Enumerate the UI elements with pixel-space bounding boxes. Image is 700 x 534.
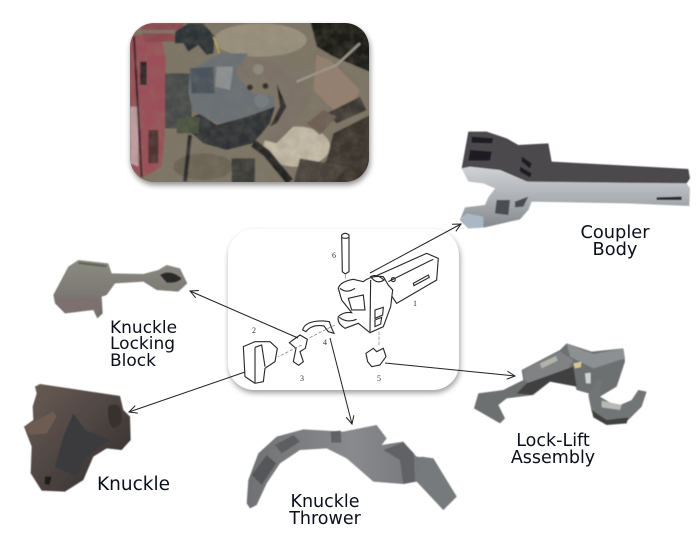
diagram: knuckle [243,342,277,383]
diagram part numbers: 6 [332,251,336,260]
diagram part numbers: 3 [300,374,304,383]
diagram part numbers: 2 [252,326,256,335]
panel: exploded coupler diagram [228,229,460,393]
arrow: to knuckle locking block [190,291,298,338]
part photo: coupler body [460,132,690,228]
diagram part numbers [252,251,417,383]
part photo: lock-lift assembly [474,343,647,425]
label: coupler body: Body [593,239,637,260]
diagram: coupler shank [363,253,438,303]
arrow: to knuckle [129,372,245,412]
diagram: pin [342,233,349,274]
label: lock-lift assembly: Assembly [511,448,595,468]
diagram: knuckle thrower [303,321,334,333]
diagram part numbers: 1 [413,299,417,308]
part photo: knuckle thrower [247,425,457,510]
label: coupler body: Coupler [580,222,650,243]
diagram: coupler head [338,276,393,333]
label: knuckle thrower: Knuckle [290,492,360,512]
label: knuckle thrower: Thrower [288,509,362,529]
part photo: knuckle [24,384,131,492]
label: knuckle locking block: Block [110,351,156,371]
label: knuckle locking block: Knuckle [110,318,177,338]
diagram: lock lift [366,348,386,367]
diagram part numbers: 4 [323,338,327,347]
label: knuckle: Knuckle [97,474,170,495]
label: lock-lift assembly: Lock-Lift [516,431,590,451]
arrow: to coupler body [370,224,461,273]
photo: coupler mounted on rail car [127,20,373,187]
arrow: to knuckle thrower [330,338,352,424]
arrow: to lock-lift assembly [385,363,515,376]
part photo: knuckle locking block [53,260,187,318]
label: knuckle locking block: Locking [110,334,175,354]
diagram: locking block [289,335,307,365]
diagram part numbers: 5 [377,374,381,383]
